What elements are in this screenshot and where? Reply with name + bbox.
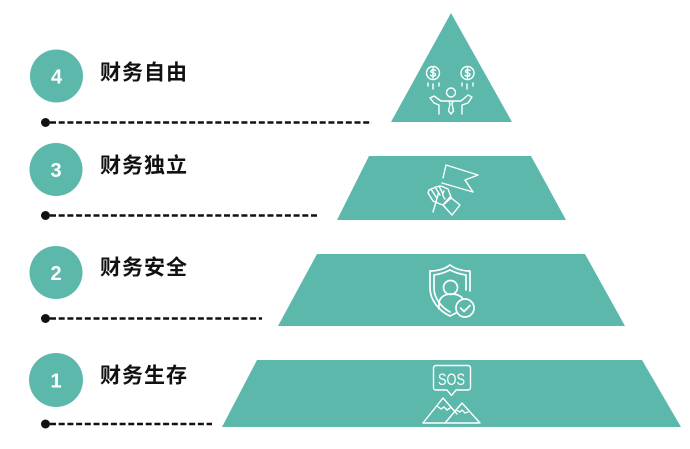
pyramid tier 4: top triangle bbox=[391, 13, 512, 122]
icon: hand holding flag bbox=[428, 165, 478, 215]
icon: shield with person and check bbox=[430, 265, 474, 317]
pyramid tier 3 bbox=[337, 156, 566, 220]
heading: 财务自由: 财务自由 bbox=[100, 62, 188, 84]
pyramid tier 1 bbox=[222, 360, 681, 427]
icon: SOS sign above mountains bbox=[423, 366, 480, 423]
heading: 财务安全: 财务安全 bbox=[100, 256, 188, 280]
number badge 4 bbox=[30, 50, 83, 102]
pyramid tier 2 bbox=[278, 254, 625, 326]
heading: 财务独立: 财务独立 bbox=[100, 154, 188, 178]
dashed leader line 3 bbox=[41, 211, 318, 220]
number badge 1: 1 bbox=[50, 370, 62, 392]
number badge 3: 3 bbox=[50, 160, 62, 182]
icon: SOS sign above mountains: SOS bbox=[438, 371, 465, 389]
number badge 4: 4 bbox=[51, 66, 63, 88]
heading: 财务生存: 财务生存 bbox=[100, 364, 188, 388]
dashed leader line 2 bbox=[41, 314, 262, 323]
dashed leader line 1 bbox=[41, 420, 212, 428]
icon: person with falling coins bbox=[426, 66, 474, 114]
number badge 2: 2 bbox=[50, 263, 62, 285]
number badge 1 bbox=[29, 353, 83, 407]
number badge 2 bbox=[30, 246, 82, 299]
number badge 3 bbox=[30, 143, 82, 196]
dashed leader line 4 bbox=[41, 118, 372, 127]
